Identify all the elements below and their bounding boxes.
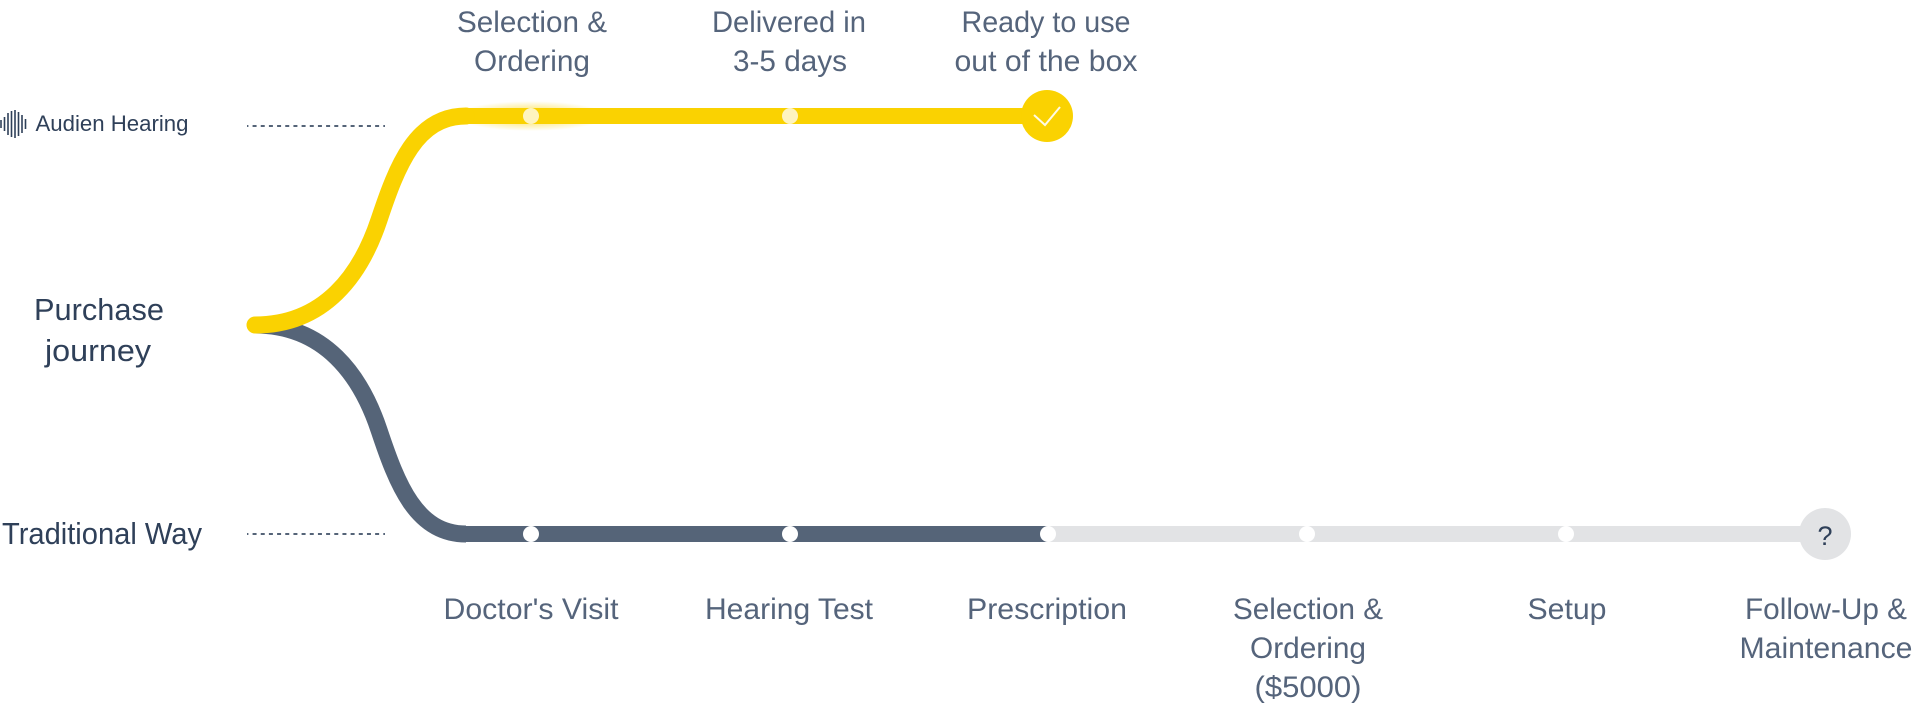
- step: Selection & Ordering: [457, 6, 607, 78]
- heading: Purchase journey: Purchase: [34, 292, 164, 327]
- step: Hearing Test: Hearing Test: [705, 593, 874, 626]
- step: Delivered in 3-5 days: 3-5 days: [733, 45, 847, 78]
- step: Delivered in 3-5 days: Delivered in: [712, 6, 866, 39]
- step: Follow-Up & Maintenance: Maintenance: [1740, 632, 1912, 665]
- remaining traditional track: [1048, 526, 1825, 542]
- traditional way path: [255, 325, 1048, 534]
- icon: sound wave: [1, 110, 26, 138]
- step: Selection & Ordering ($5000): [1233, 593, 1383, 704]
- step: Ready to use out of the box: [954, 6, 1138, 78]
- step: Follow-Up & Maintenance: [1740, 593, 1912, 665]
- traditional path dots: [523, 526, 1574, 542]
- heading: Purchase journey: [34, 292, 164, 368]
- step: Selection & Ordering ($5000): ($5000): [1254, 671, 1362, 704]
- Audien path dots: [523, 108, 798, 124]
- step: Ready to use out of the box: Ready to use: [962, 6, 1130, 39]
- step: Selection & Ordering: Ordering: [474, 45, 590, 78]
- step: Delivered in 3-5 days: [712, 6, 866, 78]
- step: Prescription: Prescription: [967, 593, 1127, 626]
- heading: Purchase journey: journey: [44, 333, 152, 368]
- Audien path: [255, 116, 1047, 325]
- step: Selection & Ordering: Selection &: [457, 6, 607, 39]
- step: Follow-Up & Maintenance: Follow-Up &: [1745, 593, 1907, 626]
- step: Doctor's Visit: Doctor's Visit: [444, 593, 619, 626]
- icon: check mark end point: [1021, 90, 1073, 142]
- dotted connector: Traditional Way: [247, 533, 385, 535]
- label: Traditional Way: Traditional Way: [2, 516, 202, 551]
- step: Ready to use out of the box: out of the box: [954, 45, 1138, 78]
- yellow glow: [455, 101, 607, 131]
- step: Setup: Setup: [1528, 593, 1606, 626]
- step: Selection & Ordering ($5000): Ordering: [1250, 632, 1366, 665]
- icon: question mark end point: ?: [1817, 521, 1833, 551]
- icon: question mark end point: [1799, 508, 1851, 560]
- dotted connector: Audien Hearing: [247, 125, 385, 127]
- logo: Audien Hearing: Audien Hearing: [36, 111, 188, 136]
- step: Selection & Ordering ($5000): Selection &: [1233, 593, 1383, 626]
